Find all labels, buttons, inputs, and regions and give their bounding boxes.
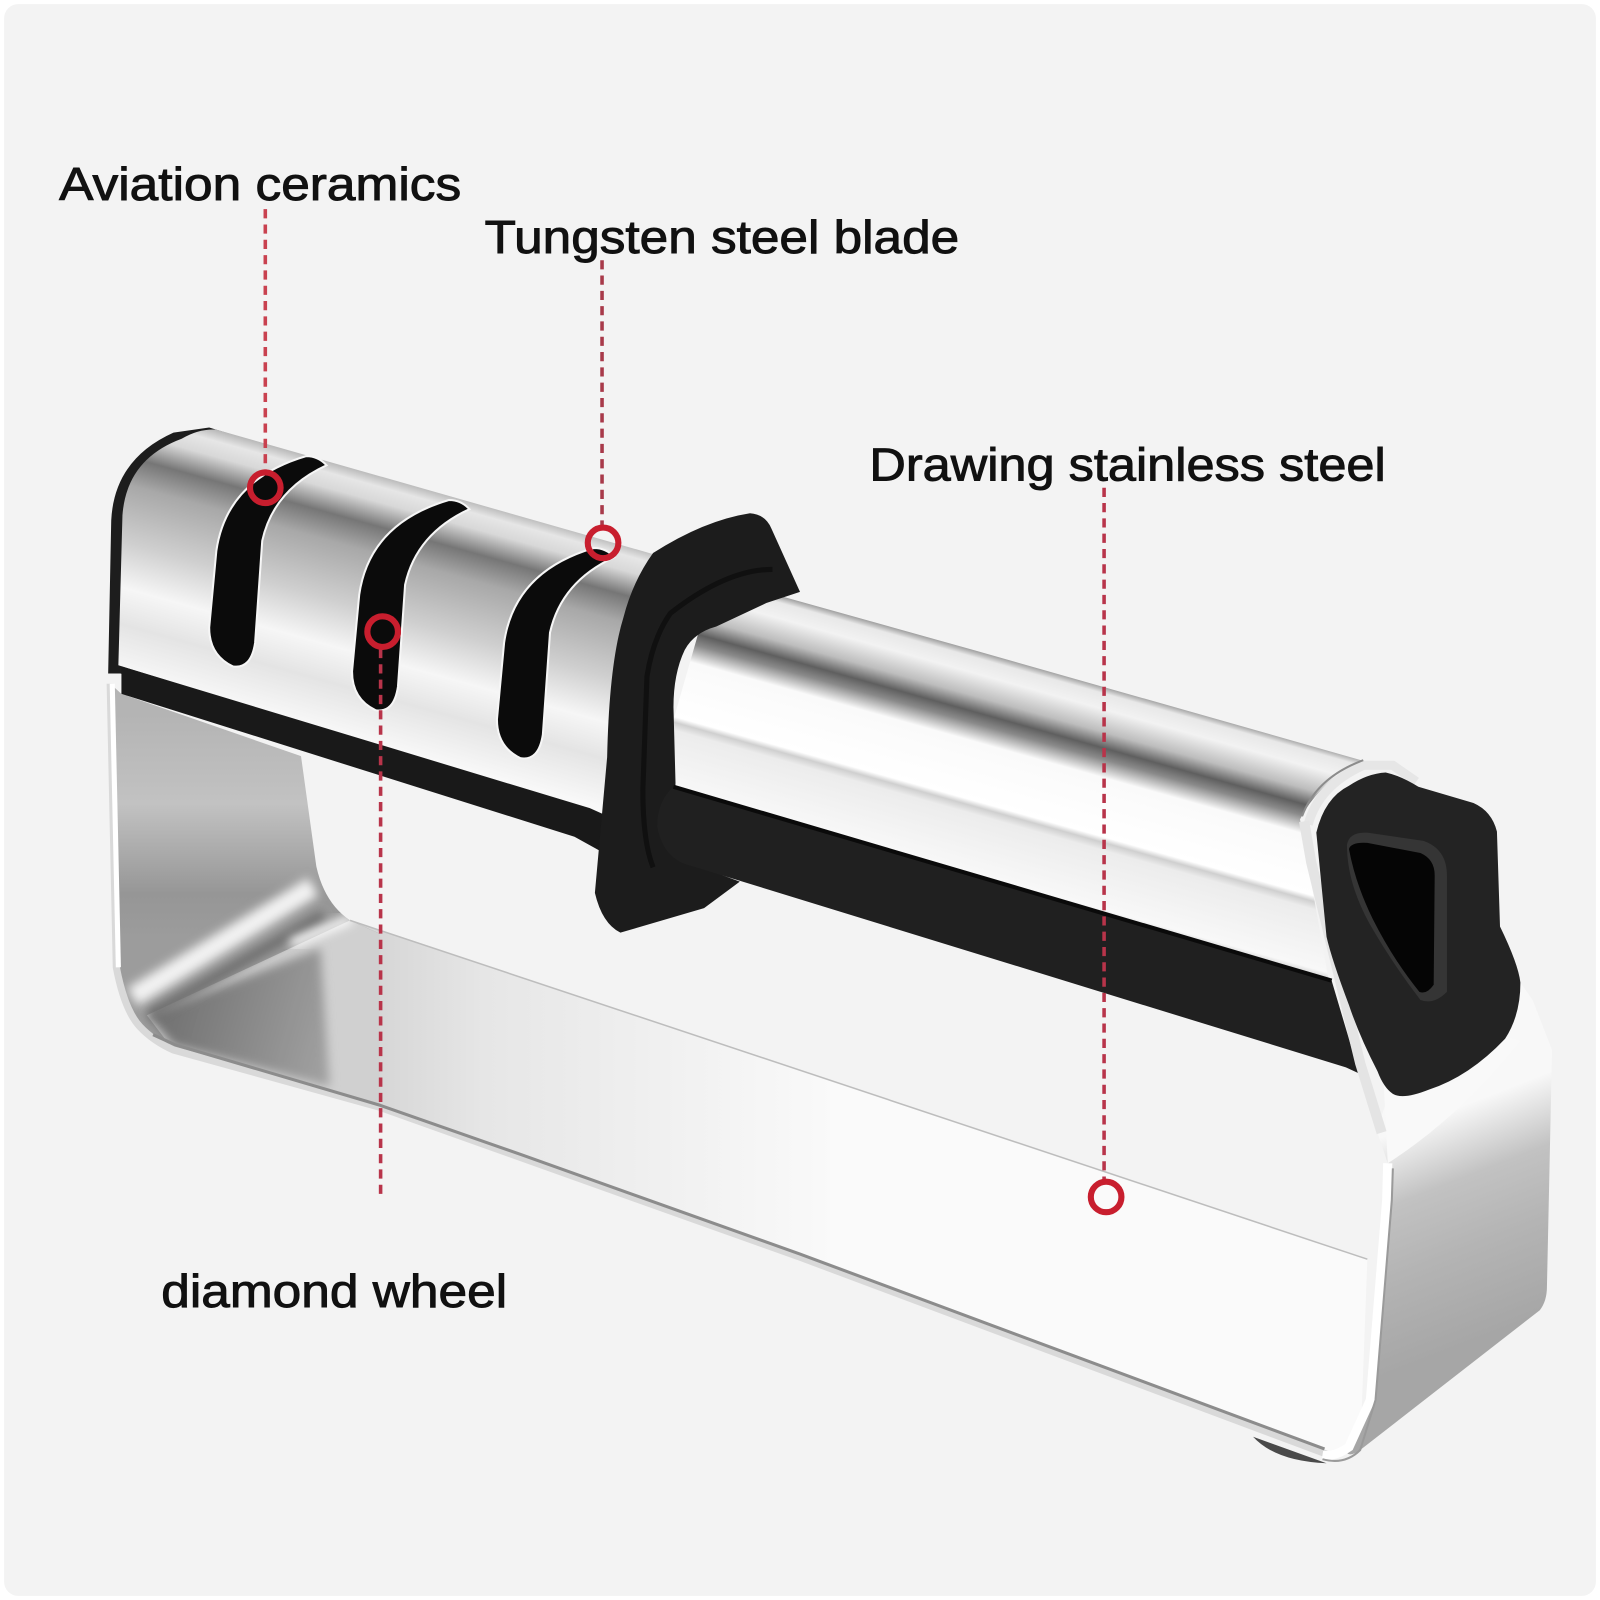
- right end panel: [1345, 983, 1552, 1454]
- black collar: [595, 513, 800, 933]
- stainless steel base: [102, 673, 1552, 1463]
- steel tube: [653, 578, 1361, 980]
- slot 1: [209, 456, 327, 667]
- slot 2: [352, 500, 469, 711]
- lower base face: [140, 920, 1367, 1454]
- callout: diamond wheel: [161, 616, 507, 1317]
- end cap knob: [1302, 760, 1520, 1133]
- head lower black strip: [121, 666, 608, 852]
- sharpener product: [102, 428, 1552, 1463]
- slot 3: [497, 548, 614, 758]
- callout: tungsten steel blade: Tungsten steel blade: [485, 211, 959, 263]
- left base face: [114, 688, 379, 1088]
- callout: aviation ceramics: [59, 158, 461, 503]
- slotted sharpening head: [108, 428, 673, 852]
- metal rim: [1308, 765, 1416, 824]
- recess: [1347, 833, 1447, 1001]
- callout: drawing stainless steel: [869, 439, 1386, 1212]
- black bar under tube: [657, 787, 1359, 1073]
- callout: diamond wheel: diamond wheel: [161, 1265, 507, 1317]
- callout: drawing stainless steel: Drawing stainless steel: [869, 439, 1386, 491]
- callout: tungsten steel blade: [485, 211, 959, 558]
- callout: aviation ceramics: Aviation ceramics: [59, 158, 461, 210]
